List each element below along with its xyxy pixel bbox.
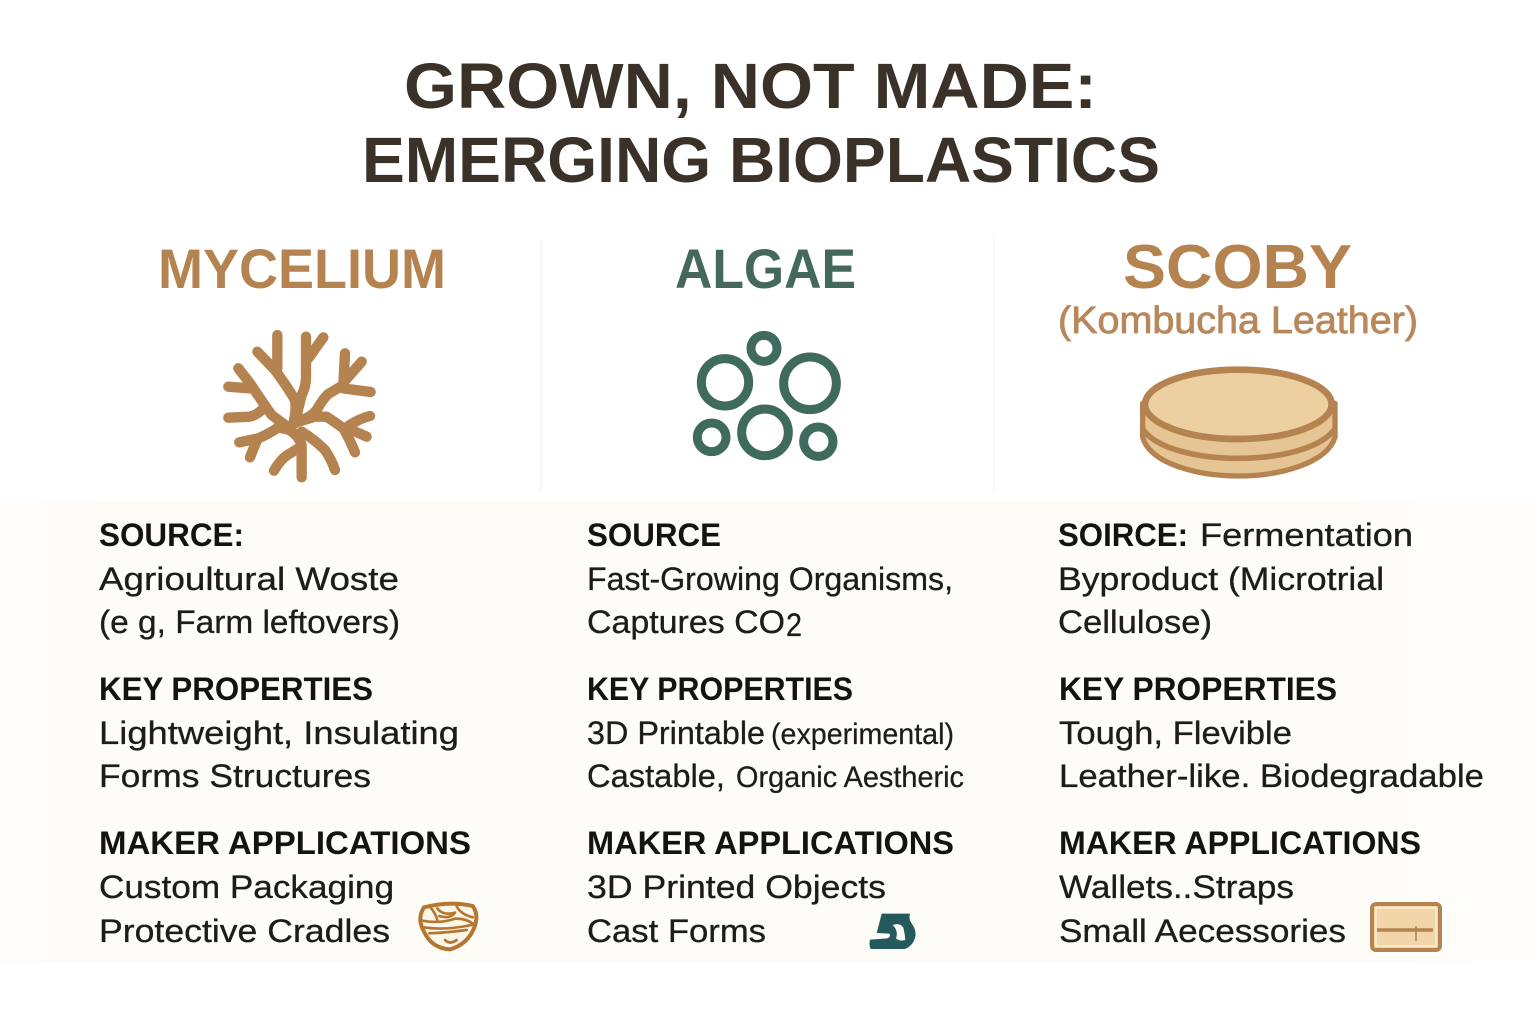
text: source: Fast-Growing Organisms, (587, 561, 953, 597)
text: key properties: Forms Structures (99, 758, 371, 794)
icon: scoby disc stack (1143, 370, 1335, 476)
text: key properties (587, 671, 964, 794)
icon: branching mycelium (228, 335, 371, 477)
heading: algae: ALGAE (675, 237, 856, 300)
title (362, 50, 1160, 196)
text: maker applications: 3D Printed Objects (587, 869, 886, 905)
text: source (99, 517, 400, 640)
text: source: SOURCE (587, 517, 721, 553)
text: source: Fermentation (1200, 517, 1413, 553)
panel: mycelium (99, 233, 1484, 950)
text: maker applications: Custom Packaging (99, 869, 394, 905)
title: EMERGING BIOPLASTICS (362, 124, 1160, 196)
text: key properties: Castable, (587, 758, 725, 794)
text: maker applications (99, 825, 471, 949)
text: source (1058, 517, 1413, 640)
text: maker applications: Cast Forms (587, 913, 766, 949)
text: key properties: KEY PROPERTIES (1059, 671, 1337, 707)
icon: 3D printed form (869, 914, 916, 949)
text: source: Captures CO (587, 604, 785, 640)
text: source: SOIRCE: (1058, 517, 1188, 553)
heading: scoby: SCOBY (1123, 233, 1352, 302)
text: key properties (1059, 671, 1484, 794)
text: maker applications: Protective Cradles (99, 913, 390, 949)
panel: algae (587, 233, 1484, 950)
text: maker applications: Wallets..Straps (1059, 869, 1294, 905)
text: maker applications: MAKER APPLICATIONS (587, 825, 954, 861)
panel: scoby (1058, 233, 1484, 950)
subheading: kombucha leather: (Kombucha Leather) (1058, 300, 1418, 342)
text: key properties: Lightweight, Insulating (99, 715, 459, 751)
text: source: (e g, Farm leftovers) (99, 604, 400, 640)
text: source: Cellulose) (1058, 604, 1212, 640)
text: key properties: Tough, Flevible (1059, 715, 1292, 751)
text: maker applications (1059, 825, 1421, 949)
text: key properties: Organic Aestheric (736, 761, 964, 794)
icon: leather wallet (1372, 904, 1440, 950)
text: source (587, 517, 953, 643)
text: key properties: KEY PROPERTIES (99, 671, 373, 707)
text: maker applications: Small Aecessories (1059, 913, 1346, 949)
text: key properties: KEY PROPERTIES (587, 671, 853, 707)
text: key properties: (experimental) (771, 718, 954, 751)
text: source: 2 (786, 607, 802, 643)
icon: woven cradle (420, 904, 476, 949)
text: key properties: Leather-like. Biodegradable (1059, 758, 1484, 794)
text: maker applications: MAKER APPLICATIONS (99, 825, 471, 861)
text: source: Agrioultural Woste (99, 561, 399, 597)
text: maker applications (587, 825, 954, 949)
heading: mycelium: MYCELIUM (158, 237, 446, 300)
text: source: Byproduct (Microtrial (1058, 561, 1384, 597)
text: key properties: 3D Printable (587, 715, 765, 751)
icon: algae cells (697, 335, 836, 456)
title: GROWN, NOT MADE: (404, 50, 1097, 122)
text: key properties (99, 671, 459, 794)
text: source: SOURCE: (99, 517, 244, 553)
text: maker applications: MAKER APPLICATIONS (1059, 825, 1421, 861)
